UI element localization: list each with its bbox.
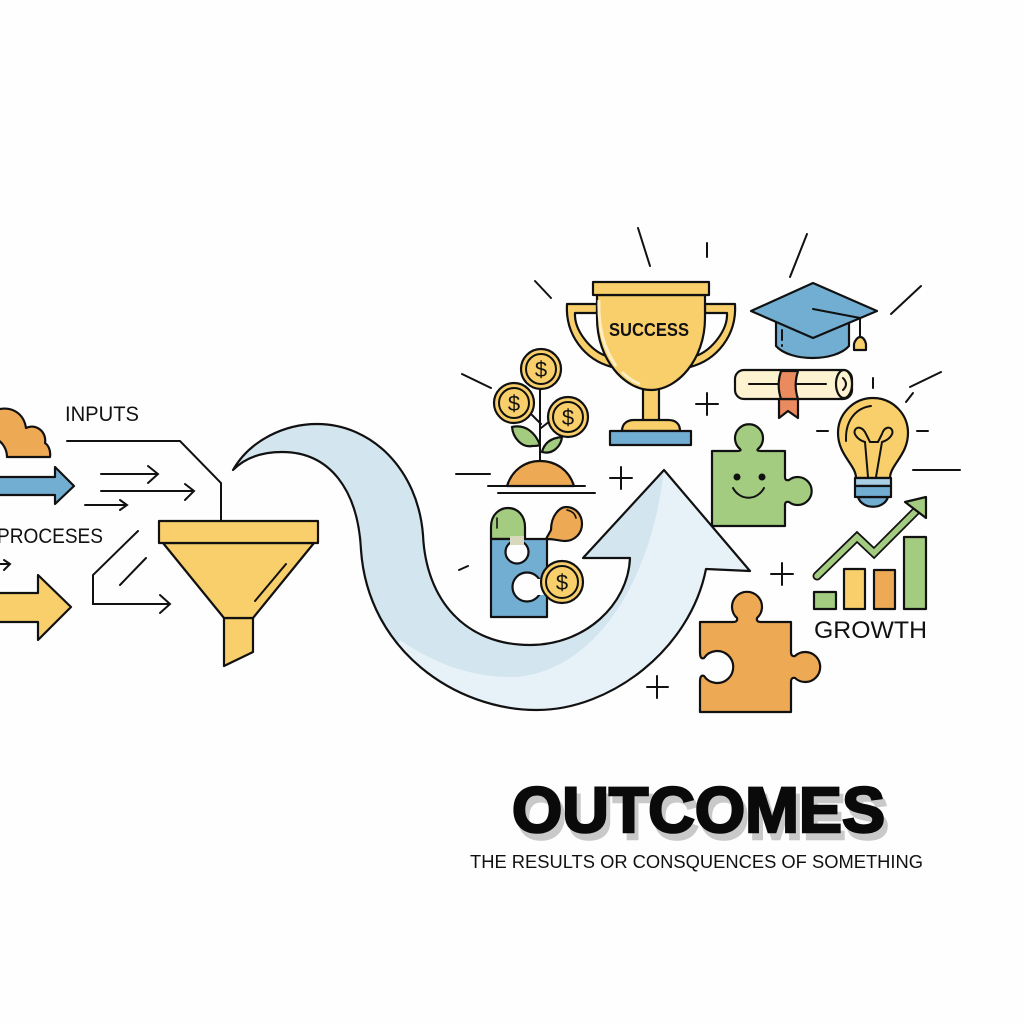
decoration: burst dashes <box>456 228 960 570</box>
icon: money plant: $ <box>562 405 574 430</box>
icon: diploma scroll <box>735 370 852 418</box>
icon: light bulb <box>838 398 908 507</box>
decoration: plus signs <box>610 393 793 698</box>
icon: funnel <box>159 521 318 666</box>
icon: orange puzzle piece <box>700 592 820 712</box>
subtitle: THE RESULTS OR CONSQUENCES OF SOMETHING <box>470 852 923 872</box>
icon: cloud <box>0 409 50 457</box>
icon: smiling green puzzle piece <box>712 424 812 526</box>
icon: trophy <box>567 282 735 445</box>
icon: blue puzzle with coin: $ <box>556 570 568 595</box>
heading: processes: PROCESES <box>0 525 103 548</box>
icon: money plant: $ <box>508 391 520 416</box>
icon: blue puzzle with coin <box>491 507 583 617</box>
title: OUTCOMES <box>516 781 889 853</box>
connector: process line to funnel <box>93 531 170 613</box>
icon: money plant <box>488 349 595 493</box>
icon: blue input arrow <box>0 467 74 504</box>
curved arrow: transformation ribbon <box>233 424 770 730</box>
icon: yellow input arrow <box>0 575 71 640</box>
trophy label: SUCCESS <box>609 320 689 340</box>
chart: growth bars and rising arrow <box>814 497 927 644</box>
arrows: input flow lines <box>0 466 194 570</box>
icon: graduation cap <box>751 283 877 358</box>
chart label: GROWTH <box>814 617 927 644</box>
connector: inputs line to funnel <box>67 441 221 521</box>
icon: money plant: $ <box>535 357 547 382</box>
title: OUTCOMES <box>512 774 885 846</box>
heading: inputs: INPUTS <box>65 403 139 426</box>
